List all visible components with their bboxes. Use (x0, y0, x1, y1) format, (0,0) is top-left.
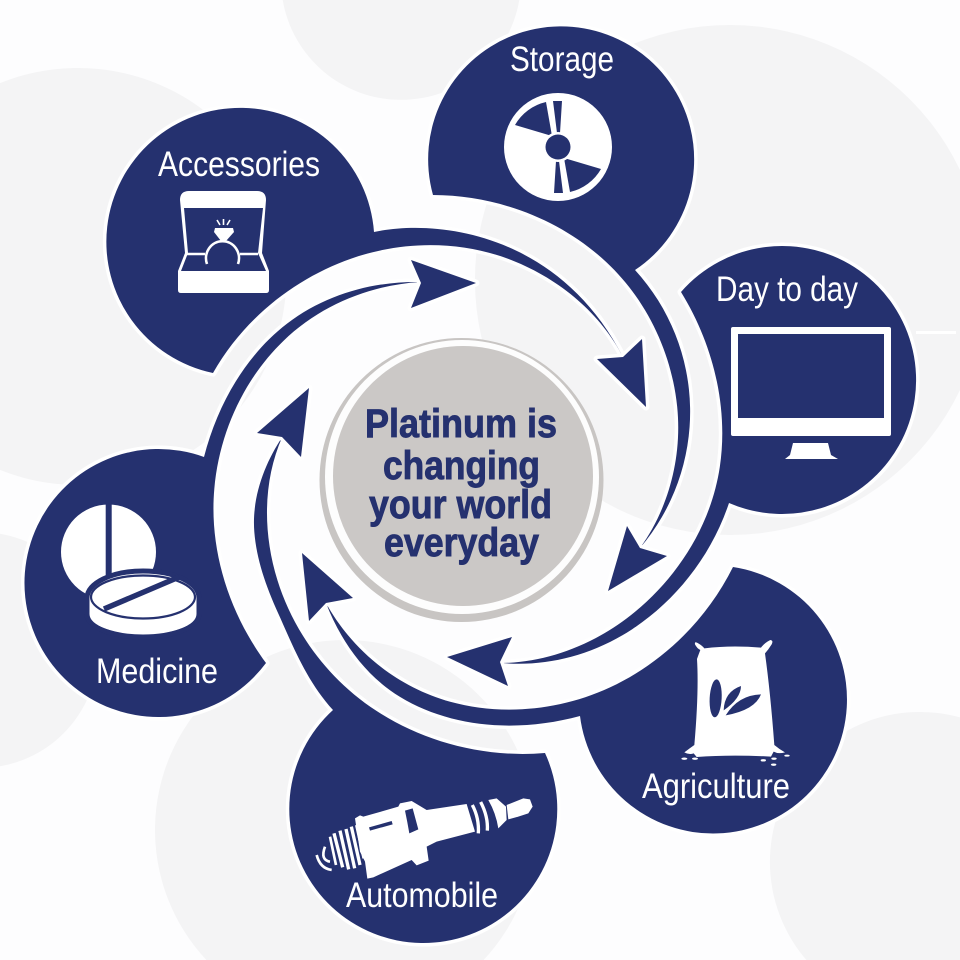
circle and spiral tail: storage (428, 26, 694, 548)
title (365, 402, 557, 565)
circle and spiral tail: medicine (24, 282, 420, 717)
label: agriculture: Agriculture (642, 767, 790, 806)
arrowhead: automobile (257, 388, 309, 457)
segment: accessories (106, 108, 646, 407)
label: medicine: Medicine (96, 652, 218, 691)
label: day to day: Day to day (716, 270, 858, 309)
circle and spiral tail: day to day (502, 246, 916, 664)
title: changing (383, 444, 540, 488)
segment: automobile (254, 388, 557, 943)
circle and spiral tail: agriculture (326, 567, 847, 833)
icon: sack (681, 640, 790, 766)
label: storage: Storage (510, 40, 614, 79)
circle and spiral tail: accessories (106, 108, 623, 373)
arrowhead: agriculture (302, 553, 353, 621)
title: Platinum is (365, 402, 557, 446)
segment: day to day (447, 246, 916, 686)
title: your world (369, 483, 552, 527)
icon: pills (61, 500, 199, 637)
segment: agriculture (302, 553, 847, 833)
arrowhead: accessories (597, 339, 646, 407)
icon: monitor (731, 327, 891, 459)
title: everyday (384, 521, 540, 565)
circle and spiral tail: automobile (254, 437, 557, 943)
label: automobile: Automobile (346, 876, 498, 915)
centre badge (320, 338, 604, 622)
segment: medicine (24, 260, 476, 717)
icon: disc (504, 93, 612, 201)
arrowhead: medicine (411, 260, 476, 308)
arrowhead: storage (608, 526, 667, 591)
segment: storage (428, 26, 694, 591)
label: accessories: Accessories (158, 145, 320, 184)
arrowhead: day to day (447, 637, 512, 686)
icon: spark plug (317, 798, 533, 879)
icon: ring box (178, 191, 269, 293)
